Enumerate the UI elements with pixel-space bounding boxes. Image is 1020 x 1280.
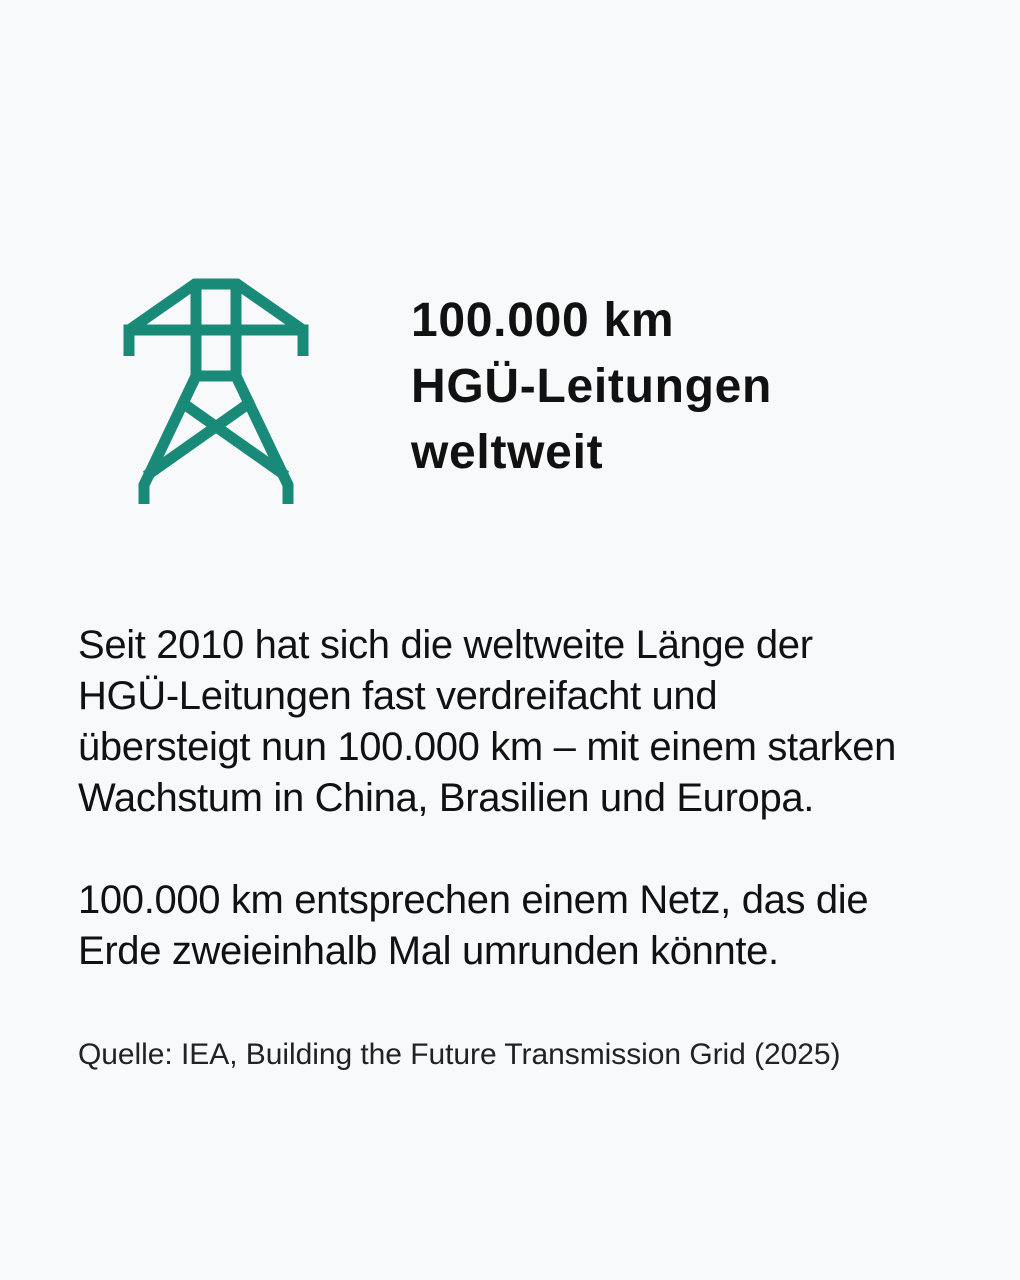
title: weltweit: [411, 426, 603, 479]
text block: paragraph 2: 100.000 km entsprechen einem Netz, das die: [78, 878, 868, 922]
text block: paragraph 2: Erde zweieinhalb Mal umrunden könnte.: [78, 929, 779, 973]
text block: paragraph 1: HGÜ-Leitungen fast verdreifacht und: [78, 674, 717, 718]
title: HGÜ-Leitungen: [411, 360, 772, 413]
title: [410, 294, 772, 479]
source: Quelle: IEA, Building the Future Transmission Grid (2025): [78, 1038, 841, 1071]
text block: paragraph 1: [78, 623, 896, 820]
text block: paragraph 2: [78, 878, 868, 973]
text block: paragraph 1: Wachstum in China, Brasilien und Europa.: [78, 776, 814, 820]
icon: transmission tower: [124, 278, 308, 504]
text block: paragraph 1: übersteigt nun 100.000 km – mit einem starken: [78, 725, 896, 769]
text block: paragraph 1: Seit 2010 hat sich die weltweite Länge der: [78, 623, 813, 667]
title: 100.000 km: [411, 294, 674, 347]
